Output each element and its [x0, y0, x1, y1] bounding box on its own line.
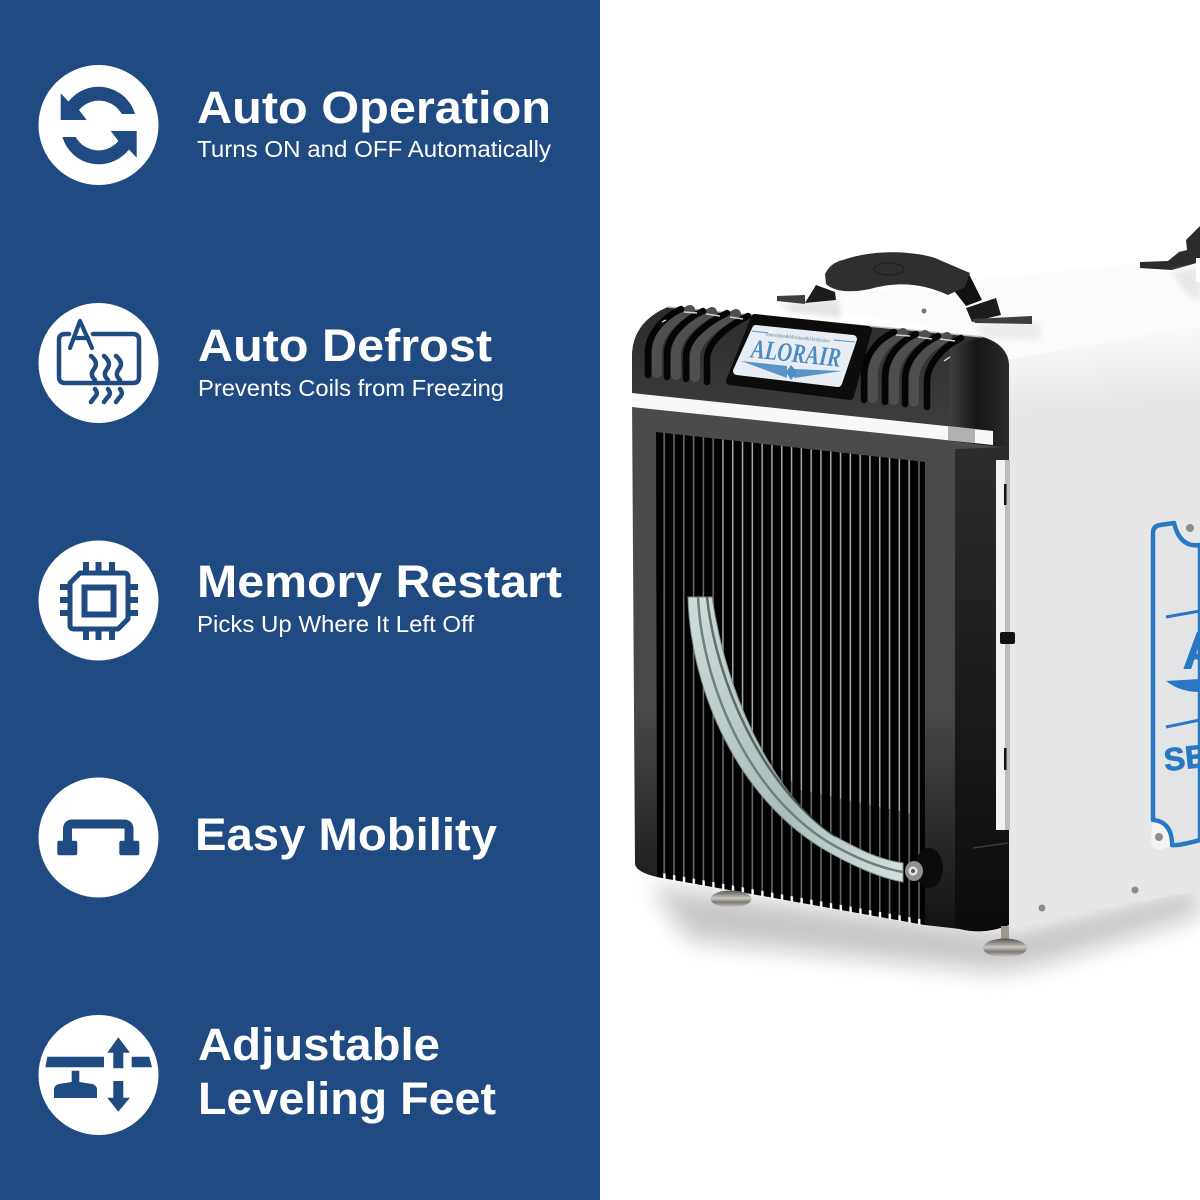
- panel: blue feature column: [0, 0, 600, 1200]
- right column of housing: [955, 447, 1009, 931]
- product photo: dehumidifier unit: [632, 226, 1200, 972]
- heading: adjustable: Adjustable: [198, 1019, 440, 1070]
- drain fitting: [905, 848, 943, 888]
- heading: leveling feet: Leveling Feet: [198, 1073, 496, 1124]
- second handle at right edge: [1140, 226, 1200, 270]
- top vented cap: [632, 307, 1009, 448]
- leveling foot right: [983, 926, 1027, 958]
- text: auto defrost description: Prevents Coils from Freezing: [198, 375, 504, 401]
- icon: auto operation arrows: [38, 65, 158, 185]
- drain tube: [688, 597, 903, 882]
- feature: auto defrost: [38, 303, 504, 423]
- leveling foot left: [710, 890, 752, 908]
- floor shadow: [650, 885, 1200, 972]
- feature: adjustable leveling feet: [38, 1015, 496, 1135]
- white trim strip: [632, 393, 993, 445]
- text: auto operation description: Turns ON and OFF Automatically: [197, 136, 551, 162]
- side screws: [1038, 886, 1138, 912]
- side panel: [1006, 325, 1200, 927]
- icon: carry handle: [38, 778, 158, 898]
- heading: auto operation: Auto Operation: [197, 82, 551, 133]
- condenser fins: [650, 425, 930, 935]
- heading: memory restart: Memory Restart: [197, 556, 562, 607]
- top surface: [778, 257, 1200, 360]
- feature: auto operation: [38, 65, 551, 185]
- top screw: [922, 308, 926, 314]
- logo badge: [730, 318, 868, 396]
- feature: easy mobility: [38, 778, 497, 898]
- side latch: [1000, 484, 1015, 770]
- logo badge: Innovation&Moisture&Ventilation: [766, 332, 830, 345]
- icon: auto defrost: [38, 303, 158, 423]
- heading: easy mobility: Easy Mobility: [195, 809, 497, 860]
- carry handle: [777, 252, 1032, 324]
- icon: memory chip: [38, 540, 158, 660]
- logo badge: ALORAIR: [748, 333, 843, 373]
- black front housing: [632, 307, 1009, 931]
- side label plate: [1151, 523, 1200, 850]
- feature: memory restart: [38, 540, 562, 660]
- heading: auto defrost: Auto Defrost: [198, 320, 492, 371]
- text: memory restart description: Picks Up Where It Left Off: [197, 611, 474, 637]
- icon: leveling foot with arrows: [38, 1015, 158, 1135]
